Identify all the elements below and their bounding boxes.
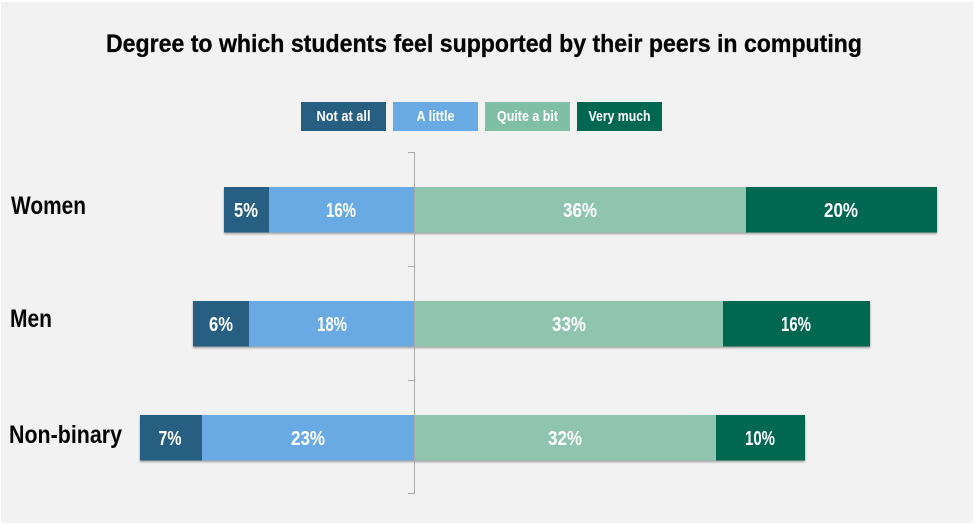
- legend item: Not at all: [301, 102, 386, 131]
- Men: Very much 16%: 16%: [781, 314, 811, 336]
- Men: Not at all 6%: 6%: [209, 314, 233, 336]
- Non-binary: Quite a bit 32%: 32%: [548, 428, 582, 450]
- legend item: Quite a bit: Quite a bit: [497, 108, 558, 125]
- legend item: Very much: Very much: [588, 108, 650, 125]
- bar: Women: [224, 187, 937, 232]
- Women: A little 16%: [269, 187, 415, 232]
- Men: Quite a bit 33%: [415, 301, 723, 346]
- Women: Not at all 5%: [224, 187, 269, 232]
- Women: Quite a bit 36%: [415, 187, 746, 232]
- legend: [301, 102, 662, 131]
- Non-binary: Not at all 7%: 7%: [158, 428, 182, 450]
- Non-binary: Not at all 7%: [140, 415, 202, 460]
- title: Degree to which students feel supported by their peers in computing: [106, 30, 862, 58]
- Women: Quite a bit 36%: 36%: [563, 200, 597, 222]
- Men: Very much 16%: [723, 301, 870, 346]
- Women: A little 16%: 16%: [326, 200, 356, 222]
- legend item: Very much: [577, 102, 662, 131]
- Women: Very much 20%: 20%: [824, 200, 858, 222]
- legend item: A little: [393, 102, 478, 131]
- row label: Non-binary: Non-binary: [9, 421, 122, 449]
- axis: [408, 152, 414, 494]
- Men: Quite a bit 33%: 33%: [552, 314, 586, 336]
- Women: Very much 20%: [746, 187, 937, 232]
- Men: Not at all 6%: [193, 301, 249, 346]
- Men: A little 18%: 18%: [317, 314, 347, 336]
- bar: Non-binary: [140, 415, 805, 460]
- Non-binary: A little 23%: [202, 415, 415, 460]
- bar: Men: [193, 301, 870, 346]
- legend item: Quite a bit: [485, 102, 570, 131]
- Non-binary: Very much 10%: [716, 415, 805, 460]
- legend item: Not at all: Not at all: [316, 108, 370, 125]
- Men: A little 18%: [249, 301, 415, 346]
- Non-binary: Quite a bit 32%: [415, 415, 716, 460]
- Women: Not at all 5%: 5%: [234, 200, 258, 222]
- Non-binary: Very much 10%: 10%: [745, 428, 775, 450]
- legend item: A little: A little: [416, 108, 454, 125]
- row label: Women: Women: [11, 192, 86, 220]
- Non-binary: A little 23%: 23%: [291, 428, 325, 450]
- row label: Men: Men: [10, 305, 52, 333]
